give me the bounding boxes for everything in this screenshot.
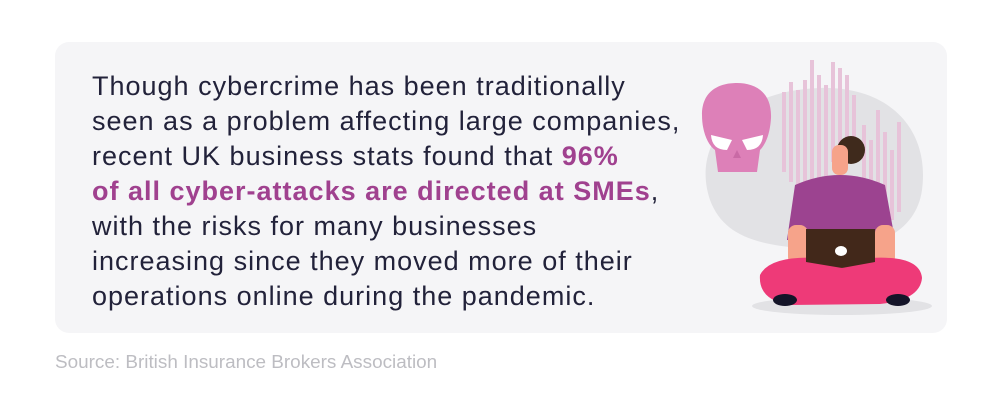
icon: woman with laptop xyxy=(752,136,932,315)
text block: seen as a problem affecting large companies, xyxy=(92,106,680,136)
text block: Though cybercrime has been traditionally xyxy=(92,71,626,101)
text block: recent UK business stats found that 96% xyxy=(92,141,619,171)
source: Source: British Insurance Brokers Association xyxy=(55,352,437,373)
icon: skull xyxy=(702,83,771,172)
text block: of all cyber-attacks are directed at SMEs, xyxy=(92,176,659,206)
text block xyxy=(92,71,680,311)
text block: operations online during the pandemic. xyxy=(92,281,595,311)
icon: gray blob xyxy=(706,88,923,250)
icon: data bars xyxy=(782,60,901,230)
panel: card xyxy=(55,42,947,333)
text block: increasing since they moved more of their xyxy=(92,246,633,276)
text block: with the risks for many businesses xyxy=(92,211,537,241)
